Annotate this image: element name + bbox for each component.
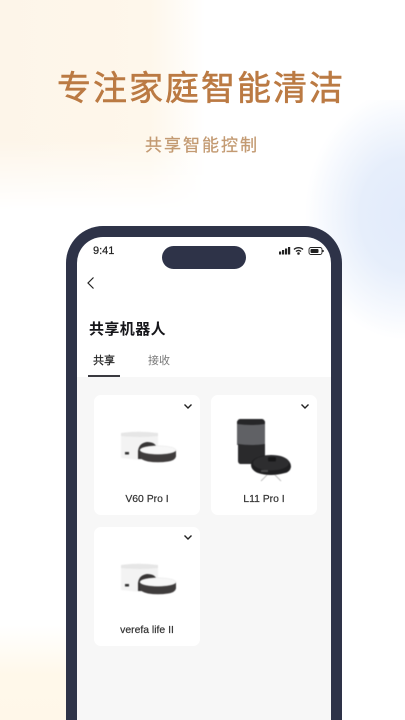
chevron bbox=[184, 404, 192, 409]
card: verefa life II bbox=[94, 527, 200, 646]
card: V60 Pro I bbox=[94, 395, 200, 515]
card: L11 Pro I bbox=[211, 395, 317, 515]
icon: signal bbox=[279, 247, 290, 254]
dynamic island bbox=[162, 246, 246, 269]
phone screen bbox=[77, 237, 331, 720]
robot image bbox=[121, 564, 177, 595]
model name: L11 Pro I bbox=[243, 494, 285, 504]
icon: battery bbox=[309, 248, 324, 254]
page heading: 共享机器人 bbox=[89, 321, 166, 338]
list panel bbox=[77, 377, 331, 720]
tab underline bbox=[88, 375, 120, 377]
back arrow bbox=[87, 277, 94, 289]
chevron bbox=[184, 535, 192, 540]
status bar time: 9:41 bbox=[93, 245, 114, 257]
phone mockup bbox=[66, 226, 342, 720]
tab: received: 接收 bbox=[148, 355, 170, 367]
icon: wifi bbox=[294, 248, 303, 254]
model name: V60 Pro I bbox=[125, 494, 169, 504]
subtitle: 共享智能控制 bbox=[145, 136, 259, 155]
tab: shared: 共享 bbox=[93, 355, 115, 367]
model name: verefa life II bbox=[120, 624, 174, 636]
robot image bbox=[121, 432, 177, 463]
chevron bbox=[301, 404, 309, 409]
status icons bbox=[279, 247, 324, 255]
robot image bbox=[236, 418, 292, 482]
title: 专注家庭智能清洁 bbox=[57, 70, 345, 108]
